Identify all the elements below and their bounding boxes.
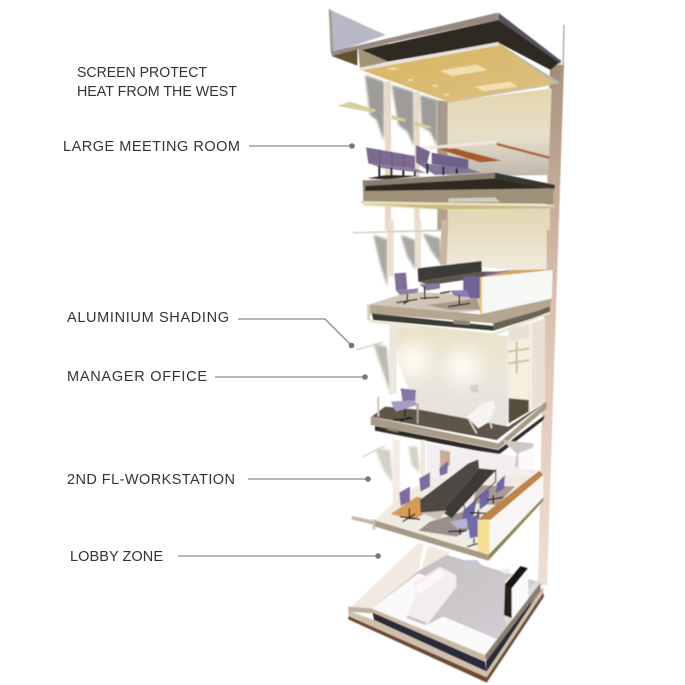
work chairs left xyxy=(399,461,448,522)
lobby rear wall xyxy=(348,543,447,610)
slab xyxy=(363,173,555,193)
downlights xyxy=(387,68,449,96)
fin xyxy=(362,445,385,457)
sun shade fins xyxy=(337,102,432,128)
parapet orange top xyxy=(480,269,553,278)
floor plate xyxy=(375,475,538,555)
work chairs right xyxy=(448,475,505,547)
glazing xyxy=(375,447,420,483)
callout: lobby zone xyxy=(70,549,381,565)
reception wall unit xyxy=(504,566,528,631)
callout: large meeting room xyxy=(63,139,355,155)
roof underside dark xyxy=(362,20,561,70)
lobby slab xyxy=(372,608,486,662)
heading: SCREEN PROTECT xyxy=(77,65,207,81)
window mullions xyxy=(385,82,420,230)
side table xyxy=(465,560,483,573)
callout: large meeting room: LARGE MEETING ROOM xyxy=(63,139,240,155)
back wall xyxy=(447,220,547,272)
white armchair xyxy=(467,401,495,433)
level 5: large meeting room xyxy=(329,9,561,230)
office armchair xyxy=(377,388,419,423)
glazing shadows xyxy=(365,75,437,147)
slab edge xyxy=(371,402,547,449)
left shadow in office xyxy=(373,343,392,397)
slab xyxy=(367,299,552,323)
roof under tan xyxy=(332,49,357,66)
manager wall xyxy=(395,326,508,427)
lobby floor xyxy=(372,555,543,660)
level 3: workstations and lobby xyxy=(348,440,544,683)
callout: 2nd floor workstation xyxy=(67,472,371,488)
west fin xyxy=(329,9,386,53)
callout: 2nd floor workstation: 2ND FL-WORKSTATION xyxy=(67,472,235,488)
rug xyxy=(372,573,498,660)
right structural column xyxy=(538,25,564,585)
level 4: workspace and manager office xyxy=(353,220,553,455)
heading: HEAT FROM THE WEST xyxy=(77,84,237,100)
glazing shadows xyxy=(373,233,442,287)
desk top xyxy=(418,272,510,285)
transom xyxy=(353,229,443,234)
right beam xyxy=(550,63,561,88)
table xyxy=(418,140,550,162)
heading xyxy=(77,65,237,100)
parapet white xyxy=(480,270,553,314)
floor and slab xyxy=(372,402,547,440)
wall side band xyxy=(437,100,448,177)
chairs xyxy=(394,270,510,307)
back room xyxy=(427,443,537,518)
callout: manager office: MANAGER OFFICE xyxy=(67,369,207,385)
callout: lobby zone: LOBBY ZONE xyxy=(70,549,163,565)
side room xyxy=(508,318,545,424)
ceiling light panels xyxy=(440,65,488,76)
soffit edge xyxy=(359,201,555,210)
callout: aluminium shading xyxy=(67,310,354,348)
slab edge xyxy=(352,516,373,525)
ceiling xyxy=(359,43,559,102)
wall light spots xyxy=(397,343,480,383)
parapet top xyxy=(478,471,543,520)
floor xyxy=(367,292,480,315)
aluminium shading fin xyxy=(356,342,383,350)
workbench xyxy=(420,459,496,520)
wall socket xyxy=(471,385,478,393)
lower wall top xyxy=(448,208,550,230)
desk screen xyxy=(418,261,482,282)
callout: manager office xyxy=(67,369,368,385)
parapet xyxy=(488,475,543,555)
sofa xyxy=(406,567,457,625)
mullions xyxy=(387,220,421,277)
roof edge xyxy=(332,13,498,56)
chairs row xyxy=(366,145,481,179)
building section xyxy=(329,9,564,683)
fin frame xyxy=(329,9,333,53)
plenum xyxy=(365,188,553,204)
callout: aluminium shading: ALUMINIUM SHADING xyxy=(67,310,229,326)
back wall xyxy=(448,88,552,177)
